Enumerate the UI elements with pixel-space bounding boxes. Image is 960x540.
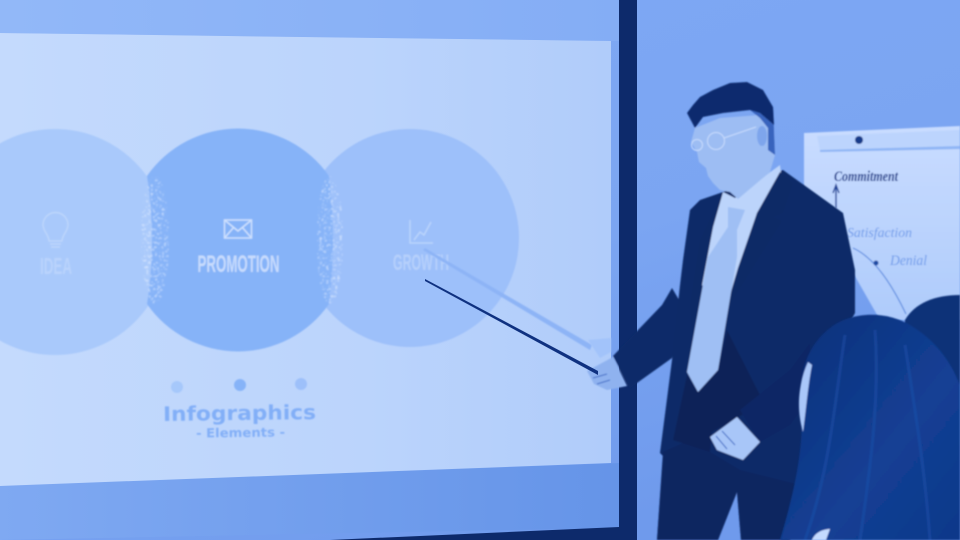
finger lines [716,431,735,449]
left lapel edge [690,192,723,345]
hair streaks [805,330,930,540]
hair [687,82,774,128]
screen bottom band [0,463,620,540]
collar highlight [812,529,830,540]
board magnet [855,136,863,144]
whiteboard [804,126,960,320]
circle: growth [301,129,519,347]
board surface [804,126,960,320]
foreground head hair [780,315,960,540]
lapel [725,172,793,312]
trousers [657,440,796,540]
ear [757,126,767,146]
back head [905,295,960,400]
speckle: left overlap [141,176,169,304]
cheek [799,362,812,432]
body silhouette: jacket and trousers [657,170,855,540]
vest shadow [673,330,760,452]
icon: envelope [224,220,252,238]
icon: line chart [410,220,433,243]
curve marker [874,260,878,266]
presenter [587,82,855,540]
label: promotion: PROMOTION [198,251,280,278]
projection screen [0,0,637,540]
handwriting: denial: Denial [889,253,927,269]
hair fade [750,107,775,155]
hand shadow on screen [588,338,611,358]
pointer shadow on screen [423,248,592,350]
lower sleeve [740,343,810,442]
label: idea: IDEA [40,253,72,279]
handwriting: satisfaction: Satisfaction [847,226,912,241]
dot: right [295,378,307,390]
audience [780,295,960,540]
dot: pale [171,381,183,393]
pointing arm sleeve [613,288,685,388]
dot: middle [234,379,246,391]
shirt [702,165,781,310]
speckle: right overlap [317,176,343,304]
circle: idea [0,129,168,355]
heading: infographics: Infographics [163,400,316,426]
arrow: up to commitment [833,185,839,208]
handwriting: commitment: Commitment [834,169,899,185]
pointer stick [425,279,598,375]
pointing hand [587,357,627,390]
slide caption [163,378,316,441]
circle: promotion [147,129,333,351]
glasses [692,127,756,150]
board top rail [817,130,960,150]
finger shading [593,374,610,384]
icon: light bulb [43,212,68,247]
curve line on board [853,248,906,314]
lower hand [710,417,760,460]
label: growth: GROWTH [393,250,449,275]
slide infographic: three circles [0,129,519,355]
projected slide [0,33,611,486]
board rail shadow [820,146,960,152]
screen top band [0,0,620,41]
tie [687,207,745,392]
subheading: elements: - Elements - [196,424,285,441]
neck and face [691,115,775,199]
screen frame [330,0,637,540]
